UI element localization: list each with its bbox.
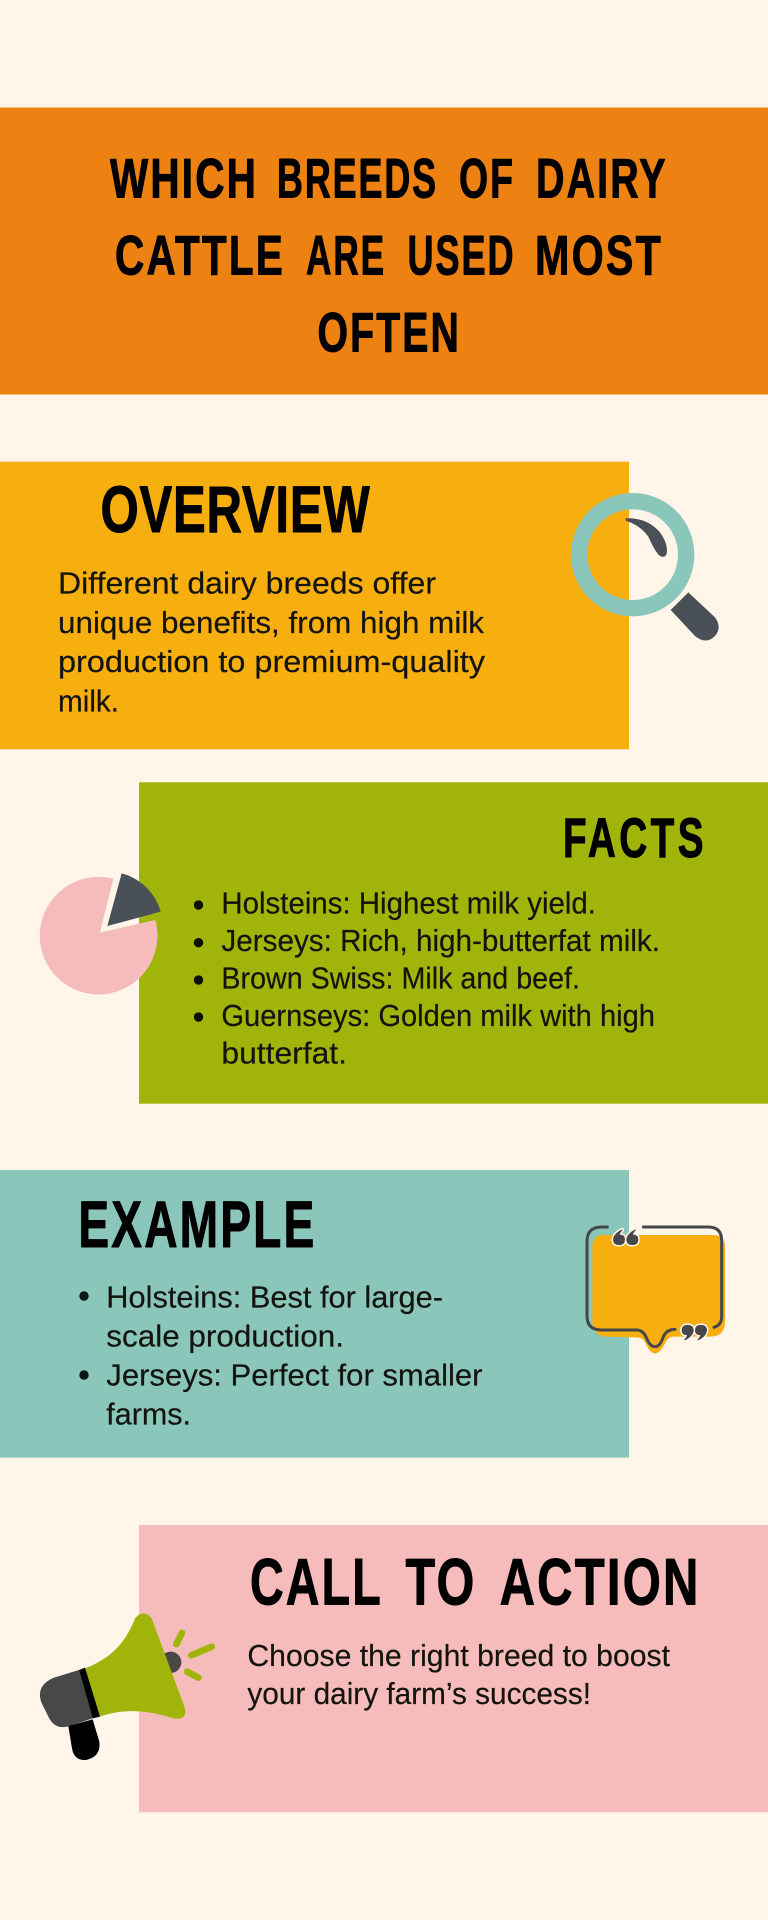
title text: OFTEN (318, 300, 461, 364)
panel: call to action (139, 1525, 768, 1812)
icon: magnifying glass (579, 501, 719, 640)
title text: USED (408, 224, 516, 286)
call to action heading: CALL (250, 1544, 382, 1618)
overview heading: OVERVIEW (100, 472, 370, 546)
call to action body text: your dairy farm’s success! (247, 1677, 591, 1711)
call to action heading: ACTION (500, 1544, 701, 1618)
title text: BREEDS (277, 146, 438, 210)
facts heading: FACTS (563, 806, 707, 869)
panel: overview (0, 462, 629, 749)
title text: WHICH (110, 146, 258, 210)
example list: Holsteins: Best for large- (106, 1280, 443, 1314)
overview body text: Different dairy breeds offer (58, 566, 436, 600)
facts list: butterfat. (221, 1036, 347, 1070)
example heading: EXAMPLE (78, 1187, 316, 1261)
opening quote mark (613, 1229, 638, 1245)
icon: speech bubble with quotes (587, 1227, 725, 1353)
overview body text: milk. (58, 685, 119, 719)
title text: OF (459, 146, 515, 210)
example list: scale production. (106, 1320, 344, 1354)
icon: megaphone (40, 1613, 212, 1760)
title text: ARE (306, 224, 386, 286)
example list: Jerseys: Perfect for smaller (106, 1359, 483, 1393)
overview body text (58, 566, 486, 719)
example list (79, 1280, 483, 1431)
title banner (0, 108, 768, 394)
call to action heading: TO (406, 1544, 476, 1618)
example list: farms. (106, 1397, 191, 1431)
call to action body text: Choose the right breed to boost (247, 1639, 671, 1673)
panel: facts (139, 782, 768, 1104)
title text: DAIRY (536, 146, 667, 210)
facts list: Holsteins: Highest milk yield. (221, 886, 596, 920)
facts list: Guernseys: Golden milk with high (221, 999, 655, 1033)
closing quote mark (682, 1325, 707, 1340)
panel: example (0, 1170, 629, 1458)
title text: MOST (535, 224, 663, 286)
overview body text: production to premium-quality (58, 645, 486, 679)
call to action body text (247, 1639, 671, 1711)
overview body text: unique benefits, from high milk (58, 606, 485, 640)
icon: pie chart (40, 873, 161, 994)
facts list: Jerseys: Rich, high-butterfat milk. (221, 924, 660, 958)
title text: CATTLE (115, 224, 285, 286)
facts list (194, 886, 660, 1070)
facts list: Brown Swiss: Milk and beef. (221, 961, 580, 995)
